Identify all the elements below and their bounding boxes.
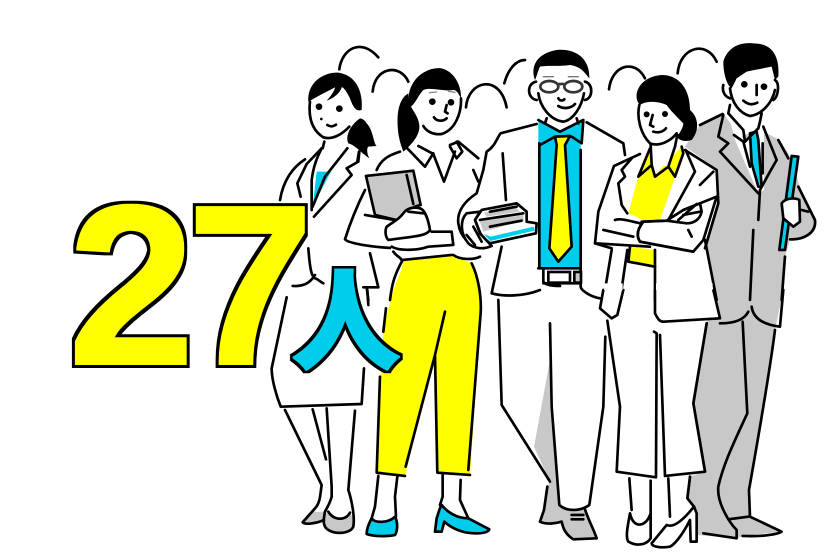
belt	[538, 268, 580, 286]
jacket lines	[595, 154, 640, 248]
grey shadow trouser leg and shoe	[534, 360, 597, 539]
head	[730, 67, 775, 116]
head	[538, 70, 585, 122]
teal shoes	[367, 517, 397, 536]
white shirt	[728, 113, 764, 193]
figure: man in grey suit holding teal folder	[685, 43, 815, 538]
white trousers	[607, 310, 707, 477]
headline unit: 人: 人	[291, 262, 401, 385]
white jacket	[477, 122, 625, 293]
figure: woman doctor in white coat	[272, 73, 378, 533]
figure: woman with crossed arms, yellow top and white suit	[595, 75, 720, 547]
headline number: 27: 7	[187, 159, 314, 413]
shoes	[627, 513, 651, 545]
yellow trousers	[377, 255, 481, 476]
grey jacket	[685, 113, 815, 300]
teal shirt and collar	[538, 118, 583, 268]
background crowd head arcs	[339, 47, 717, 107]
grey tablet	[366, 171, 421, 221]
white jacket	[595, 150, 718, 300]
stack of books	[475, 203, 537, 243]
yellow tie	[549, 136, 572, 262]
headline number: 27: 2	[68, 159, 195, 413]
figure: central man with glasses, teal shirt, yellow tie, holding books	[458, 50, 625, 539]
yellow top	[628, 147, 683, 267]
grey trousers	[687, 290, 783, 538]
hand	[782, 198, 800, 227]
head	[638, 97, 683, 167]
figure: woman with tablet and yellow trousers	[345, 68, 489, 536]
teal folder	[779, 156, 798, 250]
